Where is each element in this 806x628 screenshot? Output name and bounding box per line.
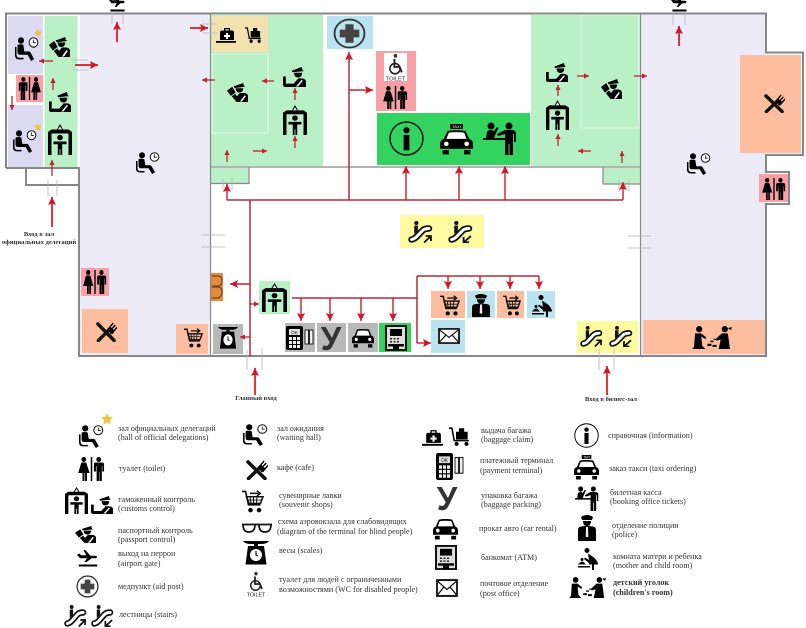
legend: baggage packing: У bbox=[437, 480, 458, 517]
icon: toilet bbox=[383, 86, 407, 109]
legend: toilet bbox=[78, 457, 166, 481]
legend: souvenir shops bbox=[242, 491, 342, 512]
icon: waiting, official hall lower bbox=[13, 130, 36, 153]
legend: ticket office: билетная касса bbox=[610, 488, 662, 497]
icon: waiting, official hall upper bbox=[15, 37, 38, 61]
icon: police bbox=[472, 294, 490, 317]
legend bbox=[65, 413, 702, 626]
panel: west passport control bbox=[212, 54, 268, 133]
legend: baggage packing bbox=[437, 480, 541, 517]
legend: accessible toilet bbox=[247, 572, 418, 598]
icon: customs officer bbox=[49, 92, 71, 112]
panel: souvenir shop one bbox=[431, 291, 465, 318]
panel: official delegations hall, upper bbox=[8, 16, 43, 74]
icon: toilet bbox=[19, 77, 41, 100]
icon: stairs up bbox=[583, 326, 601, 347]
panel: scales bbox=[213, 324, 243, 354]
legend: passport control: паспортный контроль bbox=[118, 526, 193, 535]
panel: blind diagram bbox=[211, 273, 223, 301]
panel: mother and child bbox=[527, 291, 555, 318]
icon: payment terminal bbox=[286, 326, 313, 350]
panel: east cafe bbox=[740, 55, 801, 153]
legend: customs control: таможенный контроль bbox=[118, 495, 195, 504]
panel: south east stairs bbox=[577, 321, 638, 353]
legend: cafe: кафе (cafe) bbox=[277, 463, 314, 472]
panel: ATM bbox=[379, 323, 411, 352]
legend: post office bbox=[437, 579, 549, 598]
entrance label: business: Вход в бизнес-зал bbox=[585, 396, 637, 403]
legend: mother and child: комната матери и ребенка bbox=[613, 552, 702, 561]
panel: post office bbox=[431, 320, 465, 353]
panel: west vestibule bbox=[211, 168, 249, 183]
legend: baggage packing: (baggage packing) bbox=[481, 500, 541, 509]
icon: customs gate bbox=[262, 283, 287, 312]
panel: east toilet bbox=[759, 174, 788, 202]
legend: ATM bbox=[436, 546, 537, 569]
legend: waiting hall bbox=[243, 424, 324, 446]
legend: baggage claim: (baggage claim) bbox=[481, 435, 534, 444]
icon: customs gate bbox=[283, 105, 307, 135]
icon: souvenir cart bbox=[440, 296, 459, 315]
legend: scales: весы (scales) bbox=[279, 546, 323, 555]
icon: passport control bbox=[227, 83, 248, 102]
icon: information bbox=[390, 122, 423, 155]
icon: customs gate bbox=[48, 124, 72, 155]
panel: car rental bbox=[348, 323, 378, 352]
legend: official hall: (hall of official delegations) bbox=[118, 433, 209, 442]
entrance label: officials bbox=[2, 231, 76, 246]
panel: east vestibule bbox=[603, 168, 640, 184]
legend: accessible toilet: возможностями (WC for disabled people) bbox=[279, 585, 418, 594]
legend: children's room bbox=[569, 577, 673, 598]
legend: information bbox=[575, 424, 693, 447]
icon: souvenir cart bbox=[184, 329, 202, 347]
icon: ATM bbox=[386, 326, 406, 350]
legend: baggage claim: выдача багажа bbox=[481, 426, 532, 435]
legend: cafe bbox=[248, 460, 314, 478]
legend: ticket office: (booking office tickets) bbox=[610, 497, 686, 506]
legend: baggage packing: упаковка багажа bbox=[481, 491, 538, 500]
icon: star lower bbox=[34, 123, 42, 131]
legend: police bbox=[578, 515, 679, 541]
icon: cafe bbox=[766, 94, 786, 112]
entrance label: officials: Вход в зал bbox=[24, 231, 54, 238]
panel: east passport control bbox=[581, 15, 639, 128]
legend: post office: почтовое отделение bbox=[480, 579, 549, 588]
legend: car rental bbox=[433, 519, 557, 539]
icon: taxi bbox=[440, 124, 473, 154]
panel: customs entry bbox=[259, 281, 290, 314]
legend: souvenir shops: (souvenir shops) bbox=[279, 500, 333, 509]
legend: accessible toilet: туалет для людей с ограниченными bbox=[279, 575, 402, 584]
icon: customs gate bbox=[546, 100, 569, 130]
panel: payment terminal bbox=[285, 323, 315, 352]
legend: aid post bbox=[77, 576, 184, 597]
legend: police: отделение полиции bbox=[612, 521, 679, 530]
legend: airport gate: (airport gate) bbox=[118, 559, 161, 568]
icon: east gate plane bbox=[671, 0, 687, 12]
legend: car rental: прокат авто (car rental) bbox=[479, 524, 557, 533]
legend: customs control bbox=[65, 487, 195, 514]
icon: baggage trolley bbox=[245, 28, 261, 43]
legend: post office: (post office) bbox=[480, 589, 520, 598]
panel: baggage claim bbox=[212, 16, 268, 52]
icon: baggage belt bbox=[216, 28, 236, 43]
small red flow arrows bbox=[12, 22, 679, 395]
legend: blind diagram bbox=[242, 517, 413, 536]
legend: stairs: лестницы (stairs) bbox=[119, 610, 177, 619]
legend: ticket office bbox=[575, 486, 686, 511]
icon: waiting, east hall bbox=[687, 153, 710, 175]
icon: envelope bbox=[439, 329, 459, 343]
panel: west cafe bbox=[82, 309, 128, 353]
panel: souvenir shop two bbox=[497, 291, 524, 318]
icon: scales bbox=[218, 327, 238, 349]
legend: airport gate: выход на перрон bbox=[118, 549, 176, 558]
icon: souvenir cart bbox=[503, 296, 520, 315]
icon: customs officer bbox=[283, 67, 306, 87]
panel: east waiting hall bbox=[641, 14, 765, 355]
legend: passport control bbox=[75, 526, 193, 544]
legend: airport gate bbox=[77, 549, 176, 568]
legend: police: (police) bbox=[612, 530, 637, 539]
legend: ATM: банкомат (ATM) bbox=[481, 553, 537, 562]
panel: west souvenir shop bbox=[176, 324, 208, 354]
panel: information, taxi and tickets bbox=[377, 113, 530, 165]
panel: west arrivals control zone bbox=[211, 15, 323, 166]
icon: cafe bbox=[98, 322, 118, 340]
panel: accessible toilet bbox=[376, 51, 416, 111]
icon: stairs down bbox=[612, 326, 631, 346]
legend: waiting hall: зал ожидания bbox=[277, 424, 324, 433]
legend: information: справочная (information) bbox=[608, 431, 693, 440]
icon: customs officer bbox=[546, 63, 568, 82]
panel: official delegations hall, lower bbox=[8, 105, 43, 167]
icon: accessible toilet bbox=[386, 54, 406, 82]
icon: passport control bbox=[49, 37, 70, 57]
panel: police bbox=[467, 291, 495, 318]
legend: taxi bbox=[574, 455, 697, 480]
panel: floor plan bbox=[2, 0, 803, 403]
panel: east control zone bbox=[531, 15, 640, 166]
panel: aid post bbox=[327, 16, 373, 49]
panel: baggage packing bbox=[317, 323, 346, 352]
icon: rental car bbox=[352, 329, 374, 348]
icon: passport control bbox=[601, 79, 622, 99]
legend: blind diagram: (diagram of the terminal for blind people) bbox=[277, 527, 413, 536]
panel: delegations control zone bbox=[44, 16, 78, 167]
legend: children's room: (children's room) bbox=[613, 588, 673, 597]
icon: waiting, west hall bbox=[136, 152, 159, 174]
icon: aid post bbox=[335, 19, 364, 48]
legend: baggage claim bbox=[422, 426, 534, 446]
legend: stairs bbox=[67, 605, 177, 626]
icon: star upper bbox=[34, 29, 42, 37]
panel: west toilet bbox=[81, 268, 109, 296]
legend: official hall: зал официальных делегаций bbox=[118, 424, 216, 433]
legend: payment terminal bbox=[436, 453, 553, 480]
legend: toilet: туалет (toilet) bbox=[119, 464, 166, 473]
panel: accessible toilet sign bbox=[384, 53, 407, 81]
icon: blind diagram glasses bbox=[212, 276, 222, 298]
legend: taxi: заказ такси (taxi ordering) bbox=[609, 464, 697, 473]
building walls bbox=[6, 13, 803, 370]
legend: mother and child bbox=[578, 548, 702, 570]
legend: payment terminal: (payment terminal) bbox=[480, 466, 543, 475]
legend: blind diagram: схема аэровокзала для слабовидящих bbox=[278, 517, 407, 526]
icon: baggage packing letter: У bbox=[321, 320, 342, 357]
legend: scales bbox=[243, 541, 323, 564]
panel: delegations toilet bbox=[16, 75, 43, 102]
legend: souvenir shops: сувенирные лавки bbox=[279, 491, 342, 500]
panel: children's room bbox=[643, 320, 765, 354]
icon: children's room bbox=[692, 326, 732, 349]
icon: stairs down bbox=[452, 221, 471, 242]
icon: mother and child bbox=[532, 295, 552, 317]
legend: children's room: детский уголок bbox=[613, 578, 669, 587]
legend: mother and child: (mother and child room) bbox=[613, 561, 693, 570]
panel: west waiting hall bbox=[80, 14, 210, 355]
legend: customs control: (customs control) bbox=[118, 504, 175, 513]
legend: aid post: медпункт (aid post) bbox=[118, 582, 184, 591]
legend: waiting hall: (waiting hall) bbox=[277, 433, 321, 442]
icon: ticket office bbox=[483, 122, 516, 155]
entrance label: main: Главный вход bbox=[235, 395, 277, 402]
icon: toilet bbox=[762, 178, 785, 200]
legend: payment terminal: платежный терминал bbox=[480, 456, 553, 465]
icon: stairs up bbox=[412, 221, 431, 242]
legend: official hall bbox=[79, 413, 216, 448]
icon: toilet bbox=[83, 270, 106, 294]
red route network bbox=[227, 52, 623, 356]
entrance label: officials: официальных делегаций bbox=[2, 239, 76, 246]
panel: central stairs bbox=[400, 215, 484, 248]
icon: west gate plane bbox=[109, 0, 125, 12]
legend: passport control: (passport control) bbox=[118, 535, 176, 544]
